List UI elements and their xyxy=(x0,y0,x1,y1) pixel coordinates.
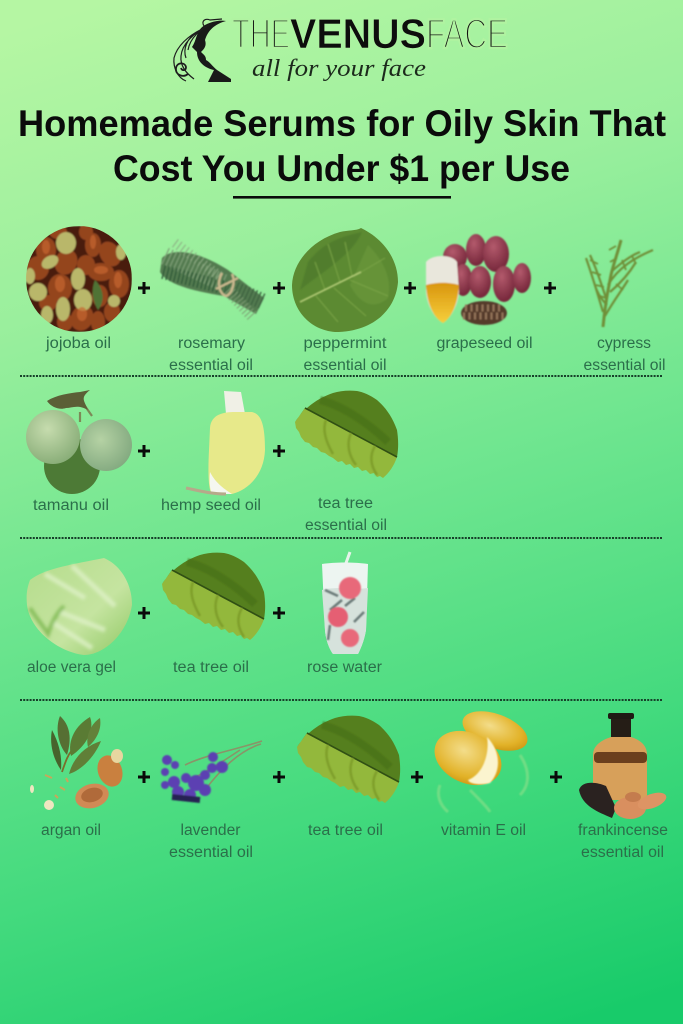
labels: tea tree xyxy=(318,495,373,512)
icon: peppermint leaf xyxy=(292,228,398,332)
labels: grapeseed oil xyxy=(436,335,532,352)
plus xyxy=(273,445,285,457)
icon: vitamin E capsules xyxy=(426,703,533,812)
icon: aloe vera gel xyxy=(27,558,132,655)
labels: essential oil xyxy=(581,844,664,861)
icon: cypress sprig xyxy=(586,240,653,327)
plus xyxy=(404,282,416,294)
labels: frankincense xyxy=(578,822,668,839)
panel: recipe 3 xyxy=(27,552,382,676)
labels: essential oil xyxy=(304,357,386,374)
labels: essential oil xyxy=(169,844,253,861)
icon: tamanu fruits xyxy=(26,390,132,494)
title: Cost You Under $1 per Use xyxy=(113,148,570,189)
labels: essential oil xyxy=(169,357,253,374)
panel: recipe 1 xyxy=(25,224,666,374)
wordmark: THE xyxy=(232,10,290,57)
labels: tea tree oil xyxy=(173,659,249,676)
icon: rose water glass xyxy=(322,552,368,654)
labels: tea tree oil xyxy=(308,822,383,839)
labels: peppermint xyxy=(304,335,387,352)
plus xyxy=(273,771,285,783)
icon: grapes, jar and seeds xyxy=(426,234,531,325)
icon: tea tree leaf xyxy=(297,716,400,803)
icon: tea tree leaf xyxy=(162,553,265,640)
icon: face silhouette with curls xyxy=(174,19,231,82)
plus xyxy=(138,282,150,294)
plus xyxy=(273,607,285,619)
panel: recipe 2 xyxy=(26,390,398,534)
plus xyxy=(550,771,562,783)
icon: hemp seed oil bottle xyxy=(186,391,265,494)
tagline: all for your face xyxy=(252,56,426,82)
labels xyxy=(41,822,668,861)
icon: jojoba beans xyxy=(25,224,132,334)
labels: tamanu oil xyxy=(33,497,109,514)
labels: jojoba oil xyxy=(45,335,111,352)
wordmark: FACE xyxy=(426,10,508,57)
icon: frankincense bottle and resin xyxy=(579,713,668,819)
icon: rosemary bundle xyxy=(160,243,264,316)
plus xyxy=(138,771,150,783)
labels: rose water xyxy=(307,659,382,676)
wordmark: VENUS xyxy=(290,10,426,57)
icon: argan leaves and nuts xyxy=(30,716,127,812)
plus xyxy=(138,607,150,619)
icon: tea tree leaf xyxy=(295,391,398,478)
plus xyxy=(544,282,556,294)
labels: hemp seed oil xyxy=(161,497,261,514)
labels xyxy=(33,495,387,534)
labels: vitamin E oil xyxy=(441,822,526,839)
labels: essential oil xyxy=(584,357,666,374)
plus xyxy=(273,282,285,294)
plus xyxy=(138,445,150,457)
labels: argan oil xyxy=(41,822,101,839)
title: Homemade Serums for Oily Skin That xyxy=(18,103,666,144)
labels: lavender xyxy=(180,822,240,839)
labels: essential oil xyxy=(305,517,387,534)
title xyxy=(18,103,666,199)
labels: cypress xyxy=(597,335,651,352)
icon: lavender xyxy=(161,741,262,801)
labels: aloe vera gel xyxy=(27,659,116,676)
labels: rosemary xyxy=(178,335,245,352)
plus xyxy=(411,771,423,783)
wordmark xyxy=(232,10,508,57)
logo: The Venus Face xyxy=(174,10,508,82)
labels xyxy=(27,659,382,676)
labels xyxy=(45,335,666,374)
panel: recipe 4 xyxy=(30,703,668,861)
